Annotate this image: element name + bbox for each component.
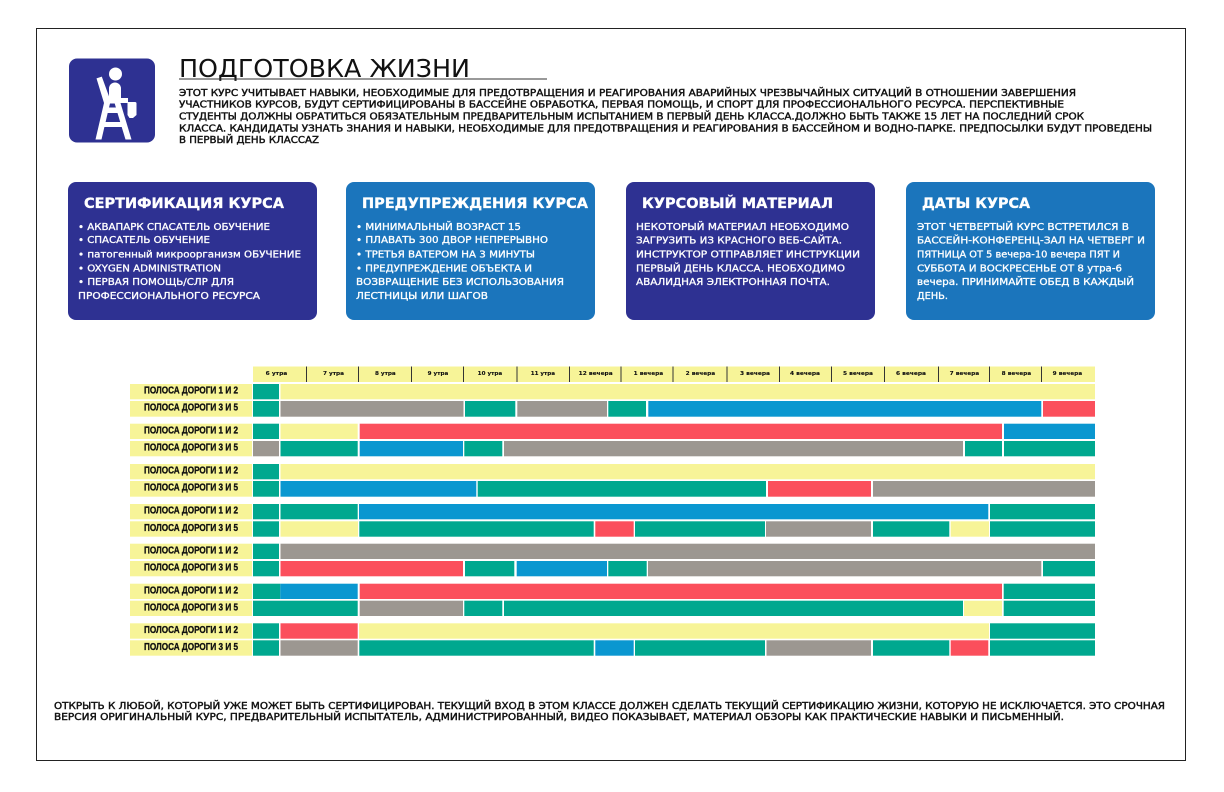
chart time header: 9 утра: [428, 371, 449, 377]
chart time header: 12 вечера: [579, 371, 613, 377]
row: lanes 3 and 5: [130, 561, 1095, 576]
row: lanes 1 and 2: ПОЛОСА ДОРОГИ 1 И 2: [144, 505, 238, 517]
panel: course warnings: [346, 182, 595, 320]
row: lanes 3 and 5: ПОЛОСА ДОРОГИ 3 И 5: [144, 522, 238, 534]
chart time header: 7 утра: [323, 371, 344, 377]
row: lanes 1 and 2: [130, 384, 1095, 399]
row: lanes 3 and 5: [130, 601, 1095, 616]
panel: course dates: ДАТЫ КУРСА: [922, 196, 1030, 212]
chart time header: 10 утра: [478, 371, 502, 377]
row: lanes 3 and 5: [130, 401, 1095, 417]
panel: course warnings: • МИНИМАЛЬНЫЙ ВОЗРАСТ 15: [356, 220, 521, 233]
intro text block: ЭТОТ КУРС УЧИТЫВАЕТ НАВЫКИ, НЕОБХОДИМЫЕ ДЛЯ ПРЕДОТВРАЩЕНИЯ И РЕАГИРОВАНИЯ АВАРИЙНЫХ ЧРЕЗВЫЧАЙНЫХ СИТУАЦИЙ В ОТНОШЕНИИ ЗАВЕРШЕНИЯ: [179, 86, 1076, 99]
intro text block: КЛАССА. КАНДИДАТЫ УЗНАТЬ ЗНАНИЯ И НАВЫКИ, НЕОБХОДИМЫЕ ДЛЯ ПРЕДОТВРАЩЕНИЯ И РЕАГИРОВАНИЯ В БАССЕЙНОМ И ВОДНО-ПАРКЕ. ПРЕДПОСЫЛКИ БУДУТ ПРОВЕДЕНЫ: [179, 122, 1152, 134]
row: lanes 1 and 2: ПОЛОСА ДОРОГИ 1 И 2: [144, 424, 238, 436]
panel: course dates: ДЕНЬ.: [917, 291, 948, 302]
panel: course warnings: ЛЕСТНИЦЫ ИЛИ ШАГОВ: [356, 291, 488, 302]
row: lanes 3 and 5: [130, 441, 1095, 456]
row: lanes 3 and 5: [130, 481, 1095, 497]
panel: course warnings: • ПРЕДУПРЕЖДЕНИЕ ОБЪЕКТА И: [356, 264, 532, 274]
panel: course dates: ПЯТНИЦА ОТ 5 вечера-10 вечера ПЯТ И: [917, 250, 1120, 260]
panel: course warnings: ПРЕДУПРЕЖДЕНИЯ КУРСА: [362, 196, 588, 212]
row: lanes 3 and 5: ПОЛОСА ДОРОГИ 3 И 5: [144, 482, 238, 494]
row: lanes 1 and 2: [130, 544, 1095, 559]
chart time header: 2 вечера: [686, 371, 715, 377]
chart time header: 6 вечера: [896, 371, 926, 377]
row: lanes 1 and 2: [130, 623, 1095, 639]
row: lanes 1 and 2: [130, 424, 1095, 439]
title: ПОДГОТОВКА ЖИЗНИ: [179, 54, 470, 83]
row: lanes 3 and 5: ПОЛОСА ДОРОГИ 3 И 5: [144, 442, 238, 454]
row group 5: [130, 544, 1095, 576]
row: lanes 3 and 5: [130, 640, 1095, 656]
footer note: ОТКРЫТЬ К ЛЮБОЙ, КОТОРЫЙ УЖЕ МОЖЕТ БЫТЬ СЕРТИФИЦИРОВАН. ТЕКУЩИЙ ВХОД В ЭТОМ КЛАССЕ ДОЛЖЕН СДЕЛАТЬ ТЕКУЩИЙ СЕРТИФИКАЦИЮ ЖИЗНИ, КОТОРУЮ НЕ ИСКЛЮЧАЕТСЯ. ЭТО СРОЧНАЯ: [54, 699, 1165, 712]
row group 2: [130, 424, 1095, 456]
panel: course material: АВАЛИДНАЯ ЭЛЕКТРОННАЯ ПОЧТА.: [636, 277, 830, 288]
panel: course material: ПЕРВЫЙ ДЕНЬ КЛАССА. НЕОБХОДИМО: [636, 262, 845, 274]
panel: course material: ИНСТРУКТОР ОТПРАВЛЯЕТ ИНСТРУКЦИИ: [636, 250, 860, 260]
chart time header: 5 вечера: [843, 371, 873, 377]
panel: course certification: СЕРТИФИКАЦИЯ КУРСА: [84, 196, 284, 212]
intro text block: УЧАСТНИКОВ КУРСОВ, БУДУТ СЕРТИФИЦИРОВАНЫ В БАССЕЙНЕ ОБРАБОТКА, ПЕРВАЯ ПОМОЩЬ, И СПОРТ ДЛЯ ПРОФЕССИОНАЛЬНОГО РЕСУРСА. ПЕРСПЕКТИВНЫЕ: [179, 98, 1064, 110]
panel: course material: [626, 182, 875, 320]
panel: course dates: БАССЕЙН-КОНФЕРЕНЦ-ЗАЛ НА ЧЕТВЕРГ И: [917, 234, 1145, 246]
chart time header: 11 утра: [531, 371, 555, 377]
panel: course certification: • патогенный микроорганизм ОБУЧЕНИЕ: [78, 250, 301, 260]
chart time header: 1 вечера: [634, 371, 663, 377]
row group 7: [130, 623, 1095, 656]
row: lanes 3 and 5: ПОЛОСА ДОРОГИ 3 И 5: [144, 562, 238, 574]
panel: course warnings: • ТРЕТЬЯ ВАТЕРОМ НА 3 МИНУТЫ: [356, 250, 535, 260]
row: lanes 1 and 2: ПОЛОСА ДОРОГИ 1 И 2: [144, 385, 238, 397]
panel: course certification: • СПАСАТЕЛЬ ОБУЧЕНИЕ: [78, 235, 210, 246]
panel: course certification: ПРОФЕССИОНАЛЬНОГО РЕСУРСА: [78, 291, 260, 302]
row: lanes 1 and 2: ПОЛОСА ДОРОГИ 1 И 2: [144, 465, 238, 477]
row group 6: [130, 584, 1095, 616]
panel: course warnings: ВОЗВРАЩЕНИЕ БЕЗ ИСПОЛЬЗОВАНИЯ: [356, 277, 564, 288]
intro text block: В ПЕРВЫЙ ДЕНЬ КЛАССАZ: [179, 133, 319, 146]
chart time header: 4 вечера: [790, 371, 820, 377]
row group 3: [130, 464, 1095, 497]
chart time header: [253, 366, 1095, 382]
row: lanes 1 and 2: [130, 464, 1095, 479]
chart time header: 3 вечера: [740, 371, 770, 377]
schedule chart: [130, 366, 1095, 656]
row: lanes 3 and 5: ПОЛОСА ДОРОГИ 3 И 5: [144, 601, 238, 613]
row: lanes 1 and 2: ПОЛОСА ДОРОГИ 1 И 2: [144, 624, 238, 636]
row: lanes 3 and 5: ПОЛОСА ДОРОГИ 3 И 5: [144, 641, 238, 653]
footer note: [54, 699, 1165, 723]
icon: lifeguard chair: [69, 58, 155, 142]
panel: course warnings: • ПЛАВАТЬ 300 ДВОР НЕПРЕРЫВНО: [356, 235, 548, 246]
intro text block: [179, 86, 1152, 146]
panel: course material: ЗАГРУЗИТЬ ИЗ КРАСНОГО ВЕБ-САЙТА.: [636, 234, 842, 246]
chart time header: 9 вечера: [1053, 371, 1082, 377]
panel: course certification: [68, 182, 317, 320]
row: lanes 1 and 2: [130, 504, 1095, 519]
panel: course dates: СУББОТА И ВОСКРЕСЕНЬЕ ОТ 8 утра-6: [917, 264, 1122, 274]
panel: course certification: • ПЕРВАЯ ПОМОЩЬ/СЛР ДЛЯ: [78, 277, 234, 288]
panel: course certification: • OXYGEN ADMINISTRATION: [78, 264, 221, 274]
row: lanes 1 and 2: [130, 584, 1095, 599]
panel: course certification: • АКВАПАРК СПАСАТЕЛЬ ОБУЧЕНИЕ: [78, 222, 270, 233]
panel: course material: НЕКОТОРЫЙ МАТЕРИАЛ НЕОБХОДИМО: [636, 220, 849, 233]
row: lanes 1 and 2: ПОЛОСА ДОРОГИ 1 И 2: [144, 584, 238, 596]
chart time header: 7 вечера: [950, 371, 979, 377]
row group 1: [130, 384, 1095, 417]
row: lanes 1 and 2: ПОЛОСА ДОРОГИ 1 И 2: [144, 544, 238, 556]
chart time header: 8 вечера: [1002, 371, 1031, 377]
footer note: ВЕРСИЯ ОРИГИНАЛЬНЫЙ КУРС, ПРЕДВАРИТЕЛЬНЫЙ ИСПЫТАТЕЛЬ, АДМИНИСТРИРОВАННЫЙ, ВИДЕО ПОКАЗЫВАЕТ, МАТЕРИАЛ ОБЗОРЫ КАК ПРАКТИЧЕСКИЕ НАВЫКИ И ПИСЬМЕННЫЙ.: [54, 710, 1064, 723]
panel: course dates: ЭТОТ ЧЕТВЕРТЫЙ КУРС ВСТРЕТИЛСЯ В: [917, 220, 1129, 233]
row: lanes 3 and 5: [130, 521, 1095, 537]
row: lanes 3 and 5: ПОЛОСА ДОРОГИ 3 И 5: [144, 402, 238, 414]
panel: course material: КУРСОВЫЙ МАТЕРИАЛ: [642, 195, 833, 212]
chart time header: 8 утра: [375, 371, 396, 377]
intro text block: СТУДЕНТЫ ДОЛЖНЫ ОБРАТИТЬСЯ ОБЯЗАТЕЛЬНЫМ ПРЕДВАРИТЕЛЬНЫМ ИСПЫТАНИЕМ В ПЕРВЫЙ ДЕНЬ КЛАССА.ДОЛЖНО БЫТЬ ТАКЖЕ 15 ЛЕТ НА ПОСЛЕДНИЙ СРОК: [179, 110, 1084, 122]
row group 4: [130, 504, 1095, 537]
chart time header: 6 утра: [266, 371, 288, 377]
panel: course dates: [906, 182, 1155, 320]
panel: course dates: вечера. ПРИНИМАЙТЕ ОБЕД В КАЖДЫЙ: [917, 275, 1134, 288]
